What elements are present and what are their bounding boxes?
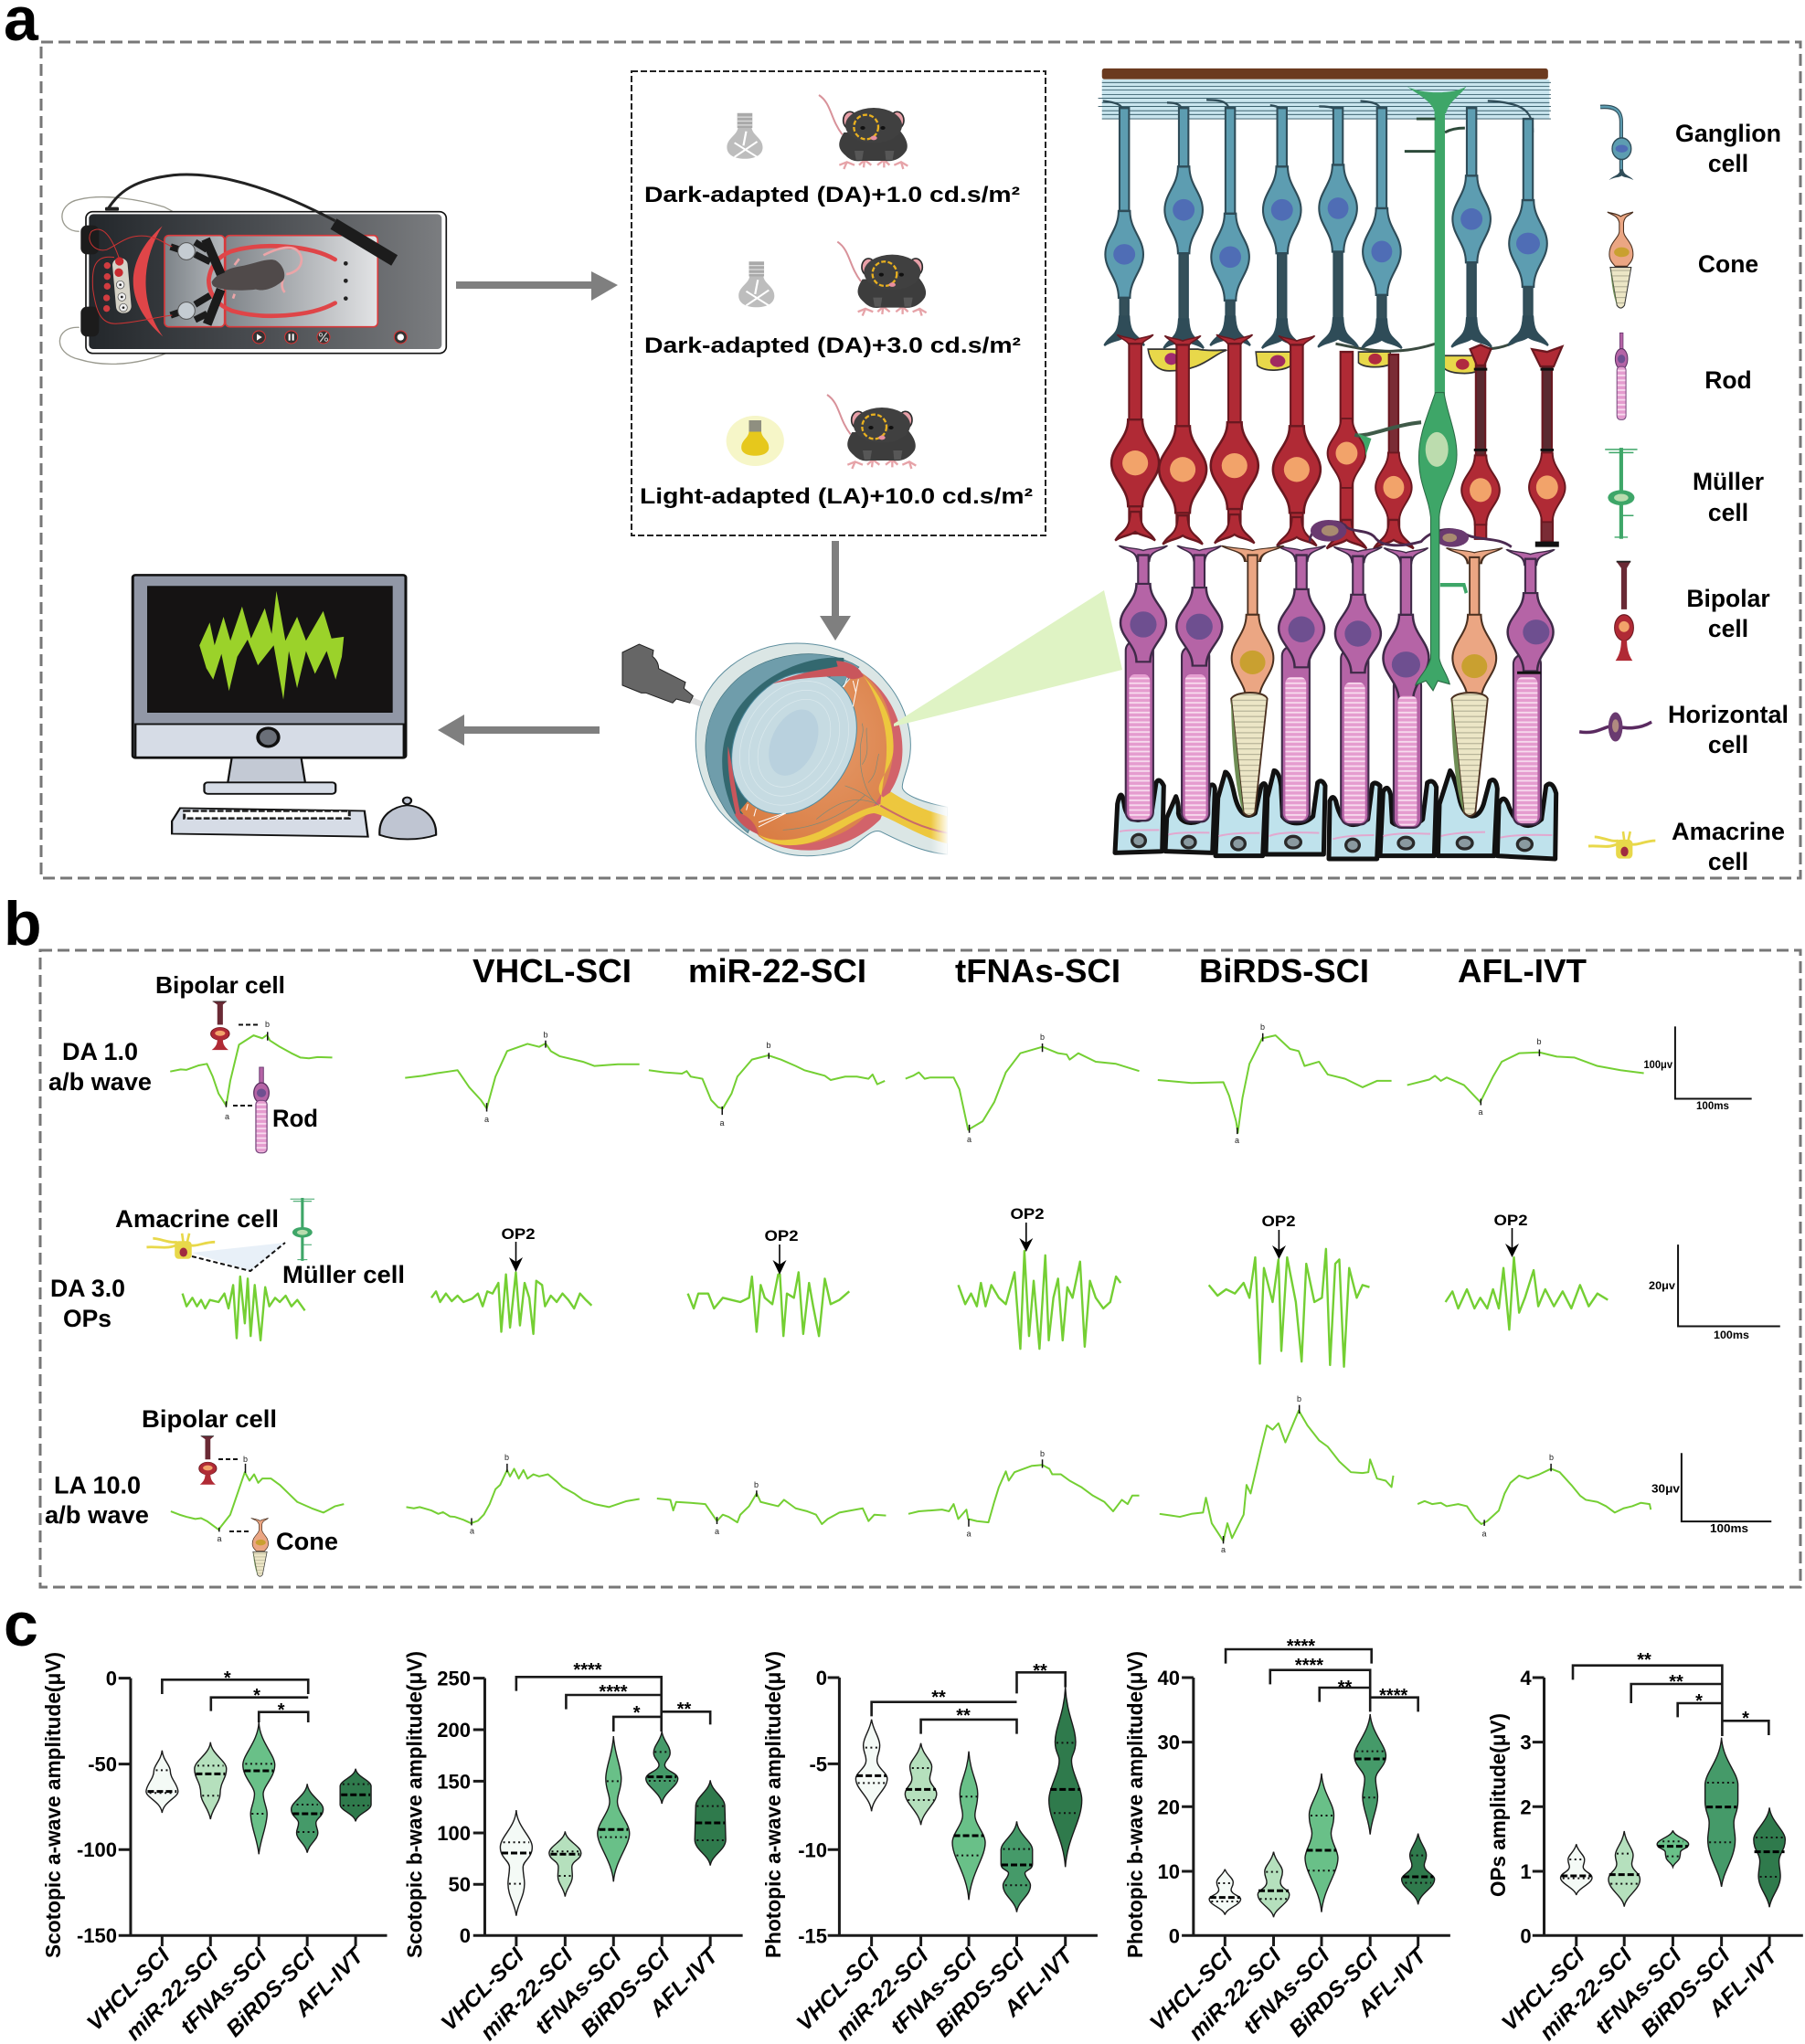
y tick labels: 10 [1158, 1860, 1180, 1883]
label: Bipolar cell: Bipolar cell [155, 971, 285, 999]
x labels: VHCL-SCI [437, 1943, 530, 2036]
icon: Muller mini [291, 1198, 314, 1261]
legend icons [1579, 107, 1655, 859]
waveform peak labels [218, 1020, 1554, 1554]
y tick labels: 200 [437, 1719, 471, 1742]
violin BiRDS-SCI [1705, 1738, 1738, 1887]
trace: AFL LA [1417, 1468, 1651, 1524]
trace: miR OP [688, 1272, 849, 1336]
violin miR-22-SCI [195, 1742, 227, 1819]
y tick labels: -50 [88, 1753, 117, 1776]
heading: BiRDS-SCI: BiRDS-SCI [1199, 952, 1369, 990]
significance stars: * [278, 1700, 285, 1721]
y tick labels: 100 [437, 1822, 471, 1845]
callout OP2 tFNAs: OP2 [1011, 1205, 1044, 1223]
label: muller: Müller [1693, 468, 1764, 495]
trace: VHCL DA1 [405, 1043, 640, 1108]
label: a/b wave: a/b wave [48, 1068, 152, 1096]
x labels: VHCL-SCI [1145, 1943, 1238, 2036]
waveform peak labels: a [720, 1118, 725, 1128]
100 ms: 100ms [1696, 1099, 1729, 1112]
icon: bipolar cell mini [211, 1001, 229, 1050]
x labels: tFNAs-SCI [1238, 1943, 1335, 2039]
heading: AFL-IVT: AFL-IVT [1458, 952, 1587, 990]
label: Muller cell: Müller cell [282, 1261, 405, 1288]
y tick labels: 250 [437, 1667, 471, 1690]
x labels: AFL-IVT [1704, 1943, 1784, 2022]
trace: BiRDS OP [1209, 1249, 1369, 1367]
label: cell: cell [1708, 150, 1748, 177]
y-axis title: Photopic a-wave amplitude(μV) [761, 1651, 785, 1958]
label: bipolar: Bipolar [1686, 585, 1770, 612]
heading: tFNAs-SCI: tFNAs-SCI [955, 952, 1120, 990]
significance stars: * [1695, 1691, 1703, 1711]
x labels: tFNAs-SCI [530, 1943, 627, 2039]
waveform peak labels: a [484, 1115, 489, 1124]
trace: BiRDS LA [1160, 1411, 1393, 1541]
label: Cone: Cone [276, 1528, 338, 1555]
y tick labels: 0 [106, 1667, 117, 1690]
waveform peak labels: b [243, 1455, 248, 1464]
waveform peak labels: b [766, 1041, 771, 1050]
arrow: eye to computer [438, 715, 600, 746]
significance stars: ** [1669, 1672, 1683, 1692]
significance stars: **** [1379, 1686, 1407, 1706]
scale bar OP [1678, 1244, 1780, 1327]
y tick labels: 20 [1158, 1795, 1180, 1818]
waveform peak labels: a [1482, 1530, 1487, 1539]
100 microvolt: 100μv [1643, 1058, 1672, 1071]
y tick labels: -10 [798, 1838, 827, 1861]
light green cone from eye to retina [894, 590, 1122, 726]
y-axis title: OPs amplitude(μV) [1486, 1713, 1510, 1897]
significance stars: **** [573, 1660, 602, 1680]
violin AFL-IVT [1402, 1834, 1435, 1904]
OP2 callouts [501, 1205, 1528, 1275]
y-axis title: Scotopic a-wave amplitude(μV) [41, 1652, 65, 1958]
label: Bipolar cell: Bipolar cell [142, 1405, 277, 1433]
y tick labels: -100 [77, 1838, 117, 1861]
ticks [969, 1033, 1551, 1543]
x labels: tFNAs-SCI [1590, 1943, 1687, 2039]
label: cell: cell [1708, 499, 1748, 526]
label: Rod: Rod [272, 1105, 318, 1132]
y tick labels: 40 [1158, 1667, 1180, 1689]
horizontal cells [1310, 520, 1512, 547]
waveform peak labels: a [218, 1534, 222, 1543]
violin tFNAs-SCI [243, 1722, 275, 1854]
icon: eye with electrode [622, 643, 949, 856]
significance stars: * [253, 1686, 260, 1706]
y tick labels: -5 [809, 1753, 827, 1775]
waveform peak labels: b [1537, 1037, 1542, 1046]
significance stars: ** [1637, 1650, 1651, 1670]
waveform peak labels: a [1221, 1545, 1226, 1554]
callout OP2 miR [764, 1227, 799, 1275]
x labels: AFL-IVT [290, 1943, 370, 2022]
x labels: VHCL-SCI [1497, 1943, 1590, 2036]
waveform peak labels: a [715, 1527, 719, 1536]
x labels: tFNAs-SCI [886, 1943, 982, 2039]
y tick labels [77, 1667, 117, 1947]
y tick labels: 4 [1520, 1667, 1532, 1689]
significance stars: ** [956, 1706, 971, 1726]
violin VHCL-SCI [1561, 1844, 1592, 1895]
x labels [1145, 1943, 1433, 2044]
significance stars [573, 1660, 691, 1723]
x labels [792, 1943, 1079, 2044]
plot [119, 1679, 388, 1946]
violin AFL-IVT [340, 1769, 371, 1821]
waveform peak labels: b [504, 1453, 509, 1462]
y tick labels: -15 [798, 1924, 827, 1947]
waveform peak labels: b [1297, 1394, 1301, 1403]
waveform peak labels: b [1260, 1022, 1265, 1032]
x labels: miR-22-SCI [122, 1943, 224, 2044]
label: LA 10.0: Light-adapted (LA)+10.0 cd.s/m² [640, 484, 1033, 509]
significance stars: ** [677, 1700, 691, 1720]
x labels: AFL-IVT [1353, 1943, 1433, 2022]
icon: ganglion cell [1600, 107, 1633, 180]
waveform peak labels: a [470, 1526, 474, 1535]
label: horizontal: Horizontal [1668, 701, 1789, 728]
trace: VHCL LA [407, 1468, 640, 1523]
violin BiRDS-SCI [292, 1784, 324, 1853]
significance stars: * [1742, 1709, 1749, 1729]
rods and cones [1120, 545, 1555, 828]
y tick labels: 50 [449, 1873, 471, 1896]
trace: miR DA1 [649, 1055, 885, 1108]
significance stars: ** [931, 1688, 946, 1708]
icon: ERG recording device [59, 175, 446, 364]
label: DA 1.0: DA 1.0 [62, 1038, 138, 1065]
column headings [472, 952, 1587, 990]
violin VHCL-SCI [146, 1751, 178, 1813]
heading: miR-22-SCI: miR-22-SCI [688, 952, 866, 990]
significance stars [1287, 1636, 1407, 1706]
cone cells [1222, 545, 1502, 816]
icon: OP wedge [192, 1243, 285, 1271]
violin miR-22-SCI [549, 1831, 581, 1897]
violin AFL-IVT [695, 1780, 726, 1866]
x labels: miR-22-SCI [832, 1943, 934, 2044]
Muller cell [1354, 86, 1466, 691]
20 microvolt: 20μv [1649, 1279, 1675, 1292]
waveforms, right columns [906, 1026, 1780, 1543]
y tick labels: -150 [77, 1924, 117, 1947]
waveform peak labels: a [967, 1135, 972, 1144]
y-axis title: Photopic b-wave amplitude(μV) [1123, 1651, 1147, 1958]
violin tFNAs-SCI [1657, 1830, 1689, 1867]
stimulus protocols box [632, 71, 1046, 535]
significance stars: * [224, 1668, 231, 1689]
x labels: miR-22-SCI [1535, 1943, 1638, 2044]
significance stars: * [633, 1703, 641, 1723]
label: LA 10.0: LA 10.0 [54, 1471, 141, 1499]
trace: tFNAs LA [908, 1465, 1140, 1522]
label: cell: cell [1708, 731, 1748, 758]
significance stars: **** [599, 1682, 628, 1702]
row labels and cell annotations [45, 971, 405, 1576]
retina schematic [1099, 69, 1655, 859]
waveforms, left three columns [170, 1032, 886, 1531]
scale bar LA [1682, 1453, 1771, 1521]
plot [1182, 1649, 1450, 1946]
trace: VHCL OP [431, 1272, 591, 1334]
panel a: ERG workflow and retina [41, 42, 1800, 878]
100 ms: 100ms [1714, 1329, 1749, 1341]
significance stars: ** [1033, 1661, 1047, 1681]
callout OP2 VHCL [501, 1225, 536, 1272]
violin BiRDS-SCI [646, 1732, 678, 1804]
100 ms: 100ms [1710, 1521, 1748, 1535]
violin BiRDS-SCI [1354, 1714, 1386, 1835]
y tick labels [798, 1667, 827, 1947]
violin BiRDS-SCI [1001, 1821, 1033, 1912]
violin miR-22-SCI [1609, 1831, 1640, 1907]
y tick labels: 150 [437, 1771, 471, 1793]
waveform peak labels: a [967, 1530, 972, 1539]
nerve fibre layer [1099, 69, 1551, 119]
plot [1533, 1666, 1803, 1946]
waveform peak labels: b [1040, 1033, 1045, 1042]
icon: bipolar cell mini [199, 1436, 217, 1485]
label: amacrine: Amacrine [1672, 818, 1785, 845]
y tick labels: 0 [816, 1667, 827, 1689]
ganglion cells [1103, 100, 1548, 348]
icon: amacrine mini [146, 1234, 215, 1259]
x labels [82, 1943, 370, 2044]
chart 1: scotopic a-wave [41, 1652, 388, 2044]
x labels: AFL-IVT [644, 1943, 725, 2022]
violin tFNAs-SCI [952, 1752, 985, 1900]
label: cell: cell [1708, 848, 1748, 875]
violin VHCL-SCI [500, 1810, 532, 1916]
violin AFL-IVT [1049, 1688, 1082, 1867]
x labels: VHCL-SCI [792, 1943, 886, 2036]
chart 4: photopic b-wave [1123, 1636, 1450, 2044]
amacrine cells [1148, 341, 1516, 374]
trace: AFL OP [1446, 1257, 1608, 1329]
y tick labels: 3 [1520, 1732, 1532, 1754]
scale bar DA1 [1675, 1026, 1752, 1098]
significance stars: **** [1295, 1656, 1323, 1676]
30 microvolt: 30μv [1651, 1482, 1681, 1495]
violin tFNAs-SCI [598, 1736, 630, 1881]
y tick labels [1520, 1667, 1532, 1947]
y tick labels [1158, 1667, 1180, 1947]
trace: tFNAs DA1 [906, 1047, 1140, 1129]
icon: cone [1608, 212, 1633, 308]
waveform peak labels: b [265, 1020, 270, 1029]
y tick labels: 0 [1520, 1924, 1532, 1947]
label: rod: Rod [1704, 366, 1752, 394]
x labels: BiRDS-SCI [577, 1943, 675, 2042]
trace: tFNAs OP [959, 1251, 1120, 1349]
icons: mice [819, 95, 927, 469]
bipolar cells [1111, 334, 1566, 548]
label: DA 3.0: DA 3.0 [50, 1275, 125, 1302]
icons: stimulus bulbs [727, 113, 784, 466]
violin miR-22-SCI [905, 1743, 937, 1825]
label: DA 1.0: Dark-adapted (DA)+1.0 cd.s/m² [644, 183, 1020, 207]
waveform peak labels: a [1479, 1107, 1483, 1117]
x labels: BiRDS-SCI [1637, 1943, 1736, 2042]
icon: cone mini [251, 1519, 269, 1576]
rod cells [1120, 545, 1555, 828]
icon: rod mini [254, 1067, 269, 1153]
violin AFL-IVT [1754, 1807, 1785, 1907]
trace: BiRDS DA1 [1158, 1035, 1392, 1133]
x labels [437, 1943, 725, 2044]
x labels [1497, 1943, 1784, 2044]
arrow: device to stimulation [456, 271, 618, 301]
label: a/b wave: a/b wave [45, 1501, 149, 1529]
label: cone: Cone [1698, 250, 1758, 278]
icon: horizontal cell [1579, 713, 1651, 742]
panel b: ERG waveforms [40, 950, 1800, 1587]
scale bar labels [1643, 1058, 1749, 1535]
x labels: BiRDS-SCI [1285, 1943, 1384, 2042]
significance stars: **** [1287, 1636, 1315, 1657]
significance stars: ** [1338, 1678, 1352, 1698]
plot [473, 1677, 743, 1946]
arrow: stimulation to eye [820, 541, 851, 641]
plot [828, 1672, 1098, 1946]
y tick labels: 1 [1520, 1860, 1532, 1883]
y tick labels: 0 [1169, 1924, 1180, 1947]
trace: example LA [171, 1472, 344, 1530]
label: OPs: OPs [63, 1305, 111, 1332]
x labels: AFL-IVT [999, 1943, 1079, 2022]
chart 5: OPs amplitude [1486, 1650, 1803, 2044]
x labels: BiRDS-SCI [222, 1943, 321, 2042]
label: DA 3.0: Dark-adapted (DA)+3.0 cd.s/m² [644, 334, 1021, 358]
icon: computer with ERG trace [133, 575, 436, 839]
panel c: violin plots [41, 1636, 1803, 2044]
icon: bipolar cell [1615, 562, 1633, 661]
trace: miR LA [657, 1493, 886, 1524]
heading: VHCL-SCI: VHCL-SCI [472, 952, 632, 990]
callout OP2 BiRDS [1261, 1213, 1296, 1259]
significance stars [224, 1668, 285, 1721]
callout OP2 miR: OP2 [764, 1227, 799, 1244]
waveform peak labels: b [754, 1480, 759, 1489]
violin miR-22-SCI [1258, 1852, 1290, 1917]
violin VHCL-SCI [1209, 1869, 1241, 1915]
y tick labels [437, 1667, 471, 1947]
legend labels [1668, 120, 1789, 875]
waveform peak labels: b [543, 1031, 548, 1040]
trace: example DA1 [170, 1035, 333, 1106]
chart 3: photopic a-wave [761, 1651, 1098, 2044]
callout OP2 BiRDS: OP2 [1261, 1213, 1296, 1230]
ticks [219, 1032, 769, 1531]
retinal pigment epithelium [1115, 770, 1556, 859]
label: Amacrine cell: Amacrine cell [115, 1205, 279, 1233]
y tick labels: 30 [1158, 1732, 1180, 1754]
label: ganglion: Ganglion [1675, 120, 1781, 147]
waveform peak labels: a [1235, 1136, 1239, 1145]
waveform peak labels: b [1549, 1453, 1554, 1462]
icon: amacrine cell [1588, 831, 1655, 859]
y-axis title: Scotopic b-wave amplitude(μV) [403, 1651, 427, 1958]
x labels: miR-22-SCI [476, 1943, 579, 2044]
chart 2: scotopic b-wave [403, 1651, 743, 2044]
y tick labels: 2 [1520, 1795, 1532, 1818]
callout OP2 AFL: OP2 [1493, 1212, 1528, 1229]
x labels: tFNAs-SCI [175, 1943, 272, 2039]
significance stars [931, 1661, 1047, 1726]
violin VHCL-SCI [855, 1720, 887, 1811]
trace: AFL DA1 [1407, 1053, 1644, 1102]
callout OP2 AFL [1493, 1212, 1528, 1257]
x labels: BiRDS-SCI [931, 1943, 1030, 2042]
violin tFNAs-SCI [1305, 1774, 1338, 1912]
x labels: miR-22-SCI [1184, 1943, 1287, 2044]
trace: example OP [183, 1276, 305, 1340]
waveform peak labels: b [1040, 1449, 1045, 1458]
callout OP2 tFNAs [1011, 1205, 1044, 1252]
label: cell: cell [1708, 615, 1748, 642]
callout OP2 VHCL: OP2 [501, 1225, 536, 1243]
waveform peak labels: a [225, 1112, 229, 1121]
significance stars [1637, 1650, 1749, 1729]
panel label b: b [4, 889, 42, 958]
icon: Muller cell [1605, 448, 1638, 539]
icon: rod [1615, 333, 1628, 419]
panel label c: c [4, 1590, 38, 1659]
y tick labels: 0 [460, 1924, 471, 1947]
x labels: VHCL-SCI [82, 1943, 175, 2036]
